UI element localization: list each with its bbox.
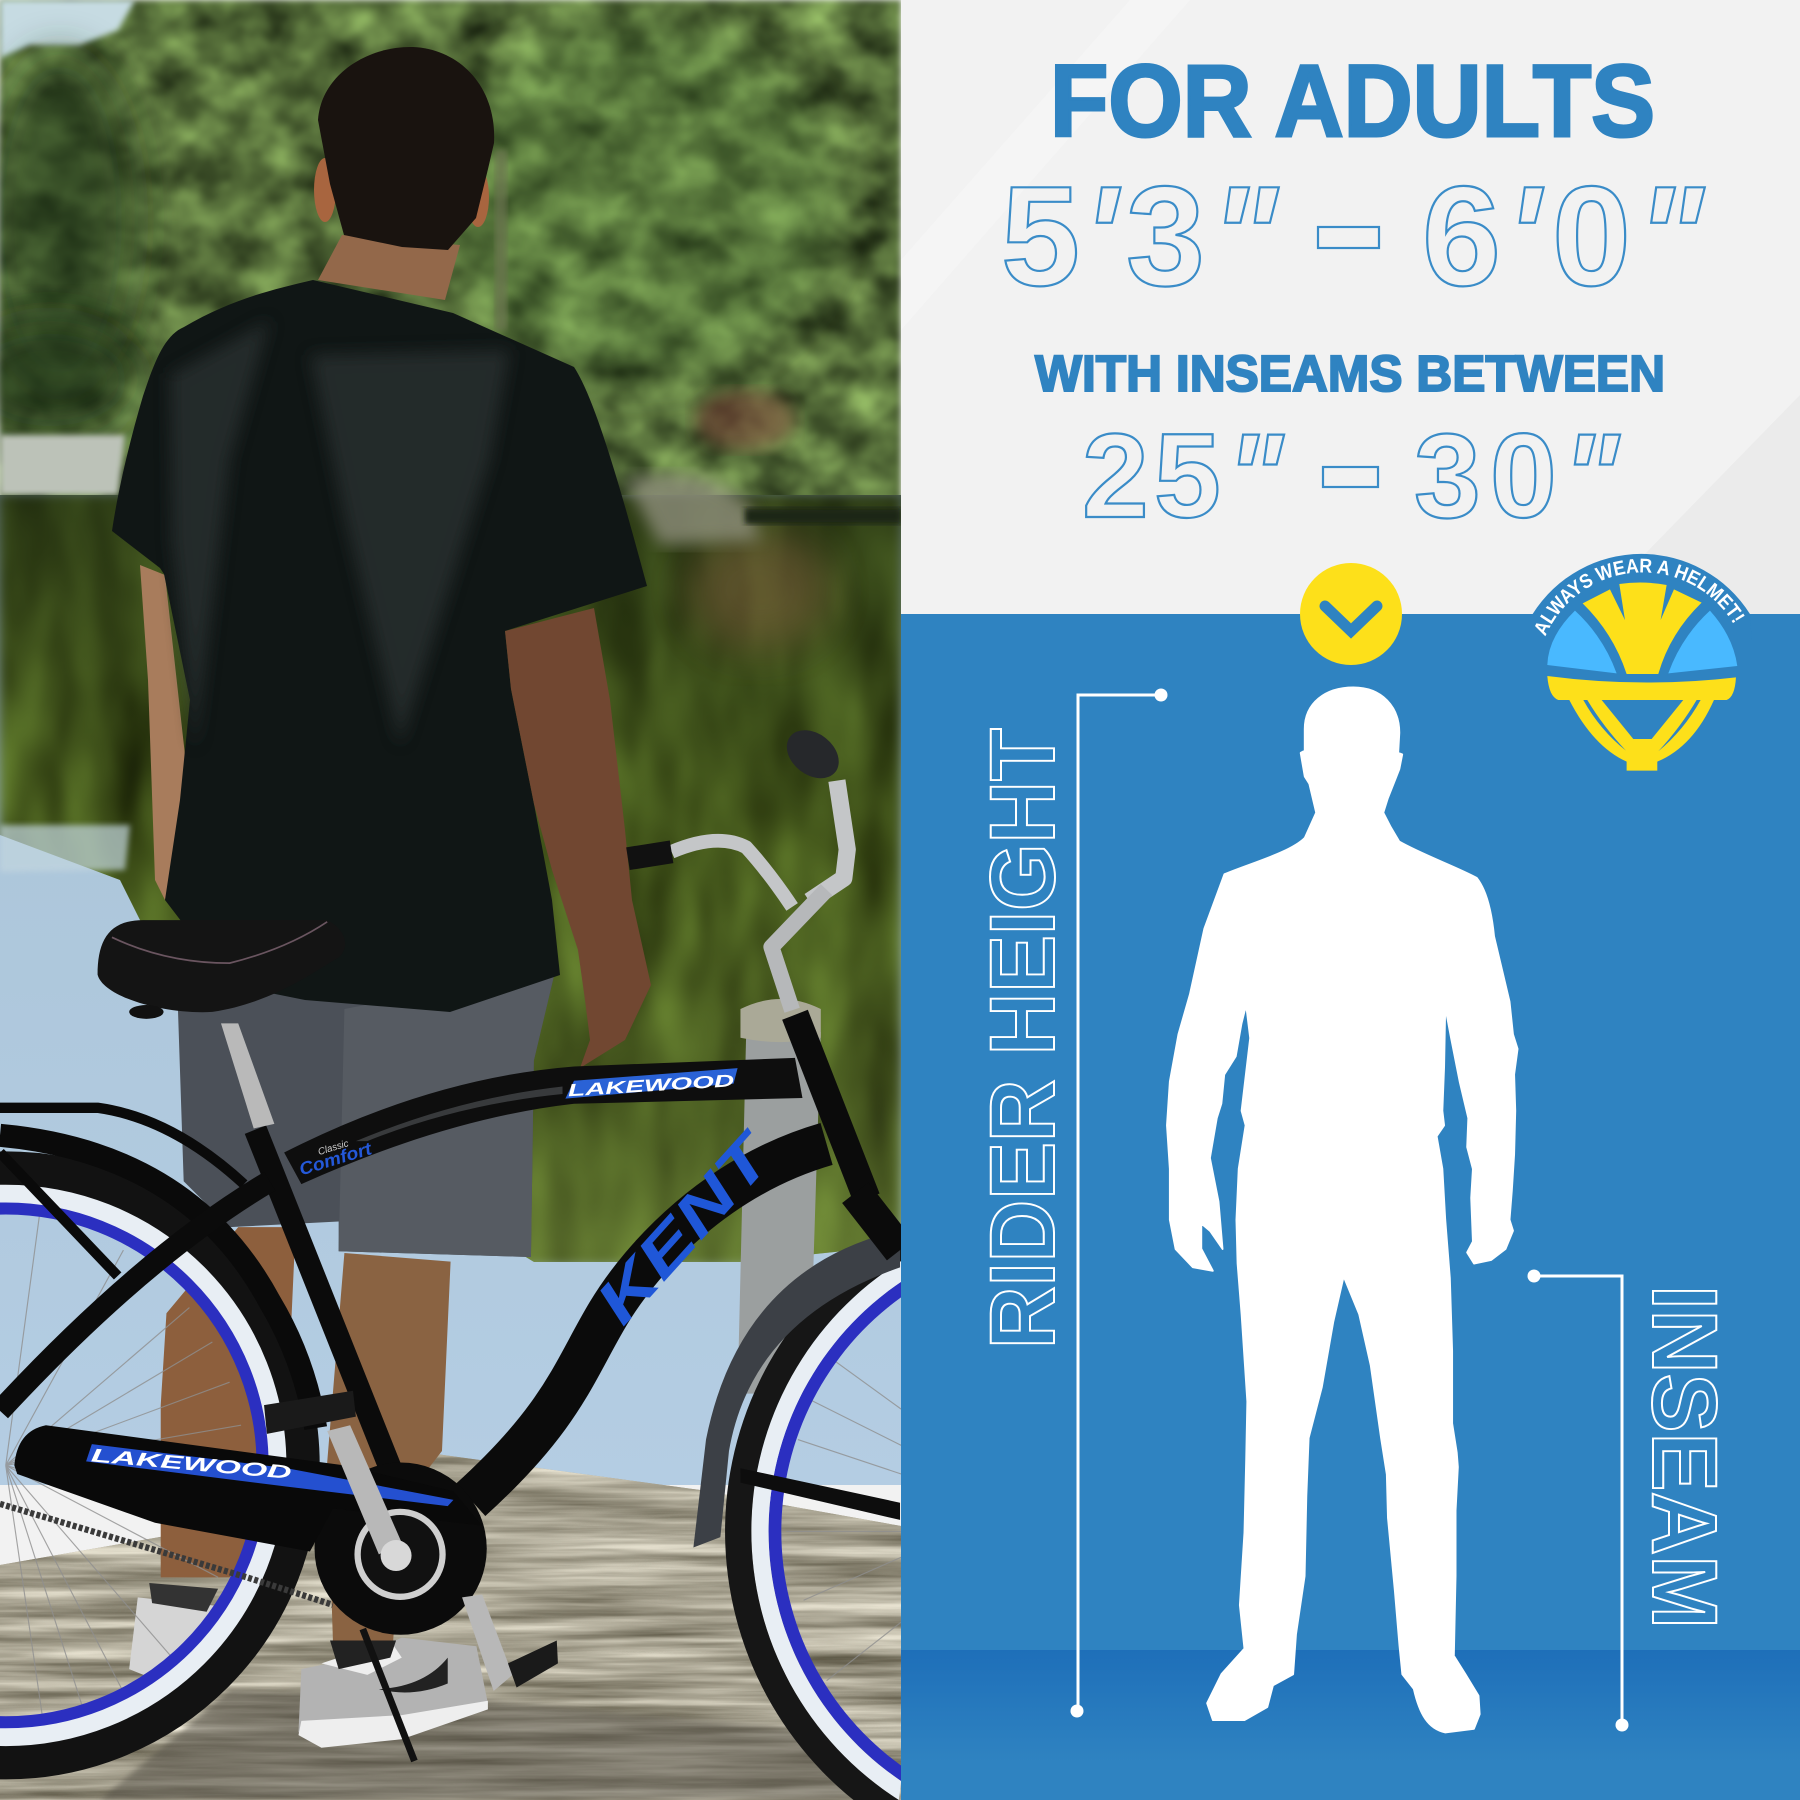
right arm and hand <box>505 608 651 1068</box>
panel: light header background <box>901 0 1800 616</box>
wooden dock <box>0 1440 901 1800</box>
height range: " <box>1636 157 1705 316</box>
rider height bracket <box>1070 688 1168 1718</box>
frame: seat tube, stays and down tube <box>0 1015 900 1500</box>
icon: helmet badge with always wear a helmet text <box>1532 554 1750 771</box>
height range: 0 <box>1552 157 1631 316</box>
rider height label: RIDER HEIGHT <box>972 728 1074 1349</box>
rear wheel <box>0 1168 303 1763</box>
bicycle <box>0 920 901 1800</box>
decal: Kent: KENT <box>582 1117 789 1336</box>
front fender and rod <box>693 1230 900 1547</box>
inseam range: 3 <box>1414 409 1481 543</box>
decal: Lakewood on top tube <box>565 1068 738 1100</box>
icon: helmet badge with always wear a helmet text: ALWAYS WEAR A HELMET! <box>1535 558 1745 636</box>
rider silhouette <box>1167 688 1518 1732</box>
hair <box>318 47 494 250</box>
subheading: with inseams between: WITH INSEAMS BETWEEN <box>1035 345 1665 402</box>
photo background: trees, sky and lake <box>0 0 901 1485</box>
neck <box>318 235 460 300</box>
shirt highlights <box>170 320 510 750</box>
legs <box>161 1227 451 1640</box>
saddle <box>98 920 345 1019</box>
chain guard decal <box>86 1444 453 1506</box>
crank arms and pedals <box>264 1391 558 1761</box>
height range: 6 <box>1422 157 1501 316</box>
inseam range: 5 <box>1154 409 1221 543</box>
metal post <box>738 999 821 1394</box>
inseam label: INSEAM <box>1633 1285 1735 1629</box>
chainring <box>315 1463 487 1635</box>
man from behind <box>112 47 651 1748</box>
handlebar with grips and stem <box>628 720 848 1010</box>
chain guard <box>14 1425 348 1552</box>
inseam range: 0 <box>1490 409 1557 543</box>
height range: ' <box>1506 157 1544 316</box>
inseam range: 2 <box>1082 409 1149 543</box>
shorts <box>178 969 556 1257</box>
left arm <box>140 565 190 900</box>
decal: Classic Comfort: Classic <box>317 1138 350 1158</box>
heading: for adults: FOR ADULTS <box>1050 44 1655 158</box>
chainring chrome cover <box>358 1512 443 1597</box>
front wheel <box>725 1231 901 1800</box>
decal: Classic Comfort: Comfort <box>297 1138 375 1179</box>
height range: 3 <box>1126 157 1205 316</box>
height range dash <box>1318 227 1379 248</box>
height range: " <box>1210 157 1279 316</box>
seat post <box>221 1023 274 1128</box>
panel: lifestyle photo of rider and bike <box>0 0 901 1800</box>
rear fender and rack <box>0 1108 316 1428</box>
ears <box>314 158 489 227</box>
panel: blue rider diagram background <box>901 614 1800 1800</box>
black t-shirt <box>112 280 647 1012</box>
frame: top tube <box>284 1058 802 1184</box>
height range: ' <box>1083 157 1121 316</box>
inseam range: " <box>1562 409 1621 543</box>
chain guard decal: LAKEWOOD <box>90 1445 293 1484</box>
decal: Lakewood on top tube: LAKEWOOD <box>567 1070 735 1100</box>
inseam bracket <box>1528 1270 1628 1732</box>
icon: yellow chevron badge <box>1300 563 1402 665</box>
inseam range dash <box>1323 467 1378 487</box>
height range: 5 <box>1001 157 1080 316</box>
shoes <box>129 1583 488 1748</box>
chain <box>0 1504 333 1605</box>
inseam range: " <box>1226 409 1285 543</box>
